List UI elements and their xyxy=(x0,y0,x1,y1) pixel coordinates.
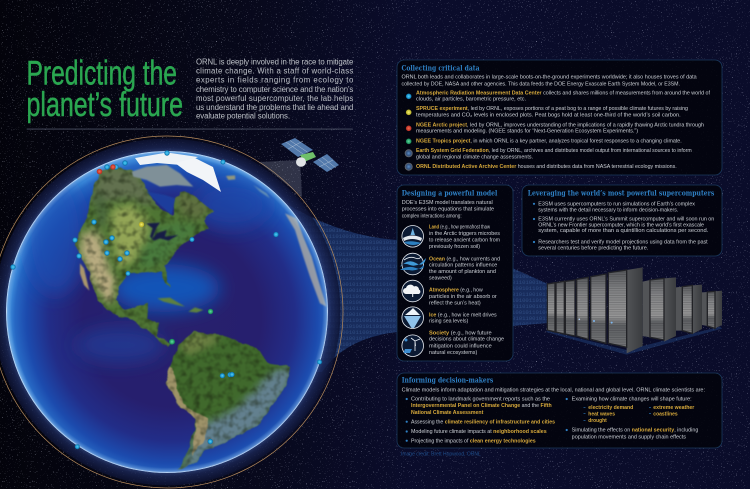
model factors text: the amount of plankton and xyxy=(429,269,496,275)
intro paragraph: us understand the problems that lie ahead and xyxy=(196,103,353,112)
intro paragraph: climate change. With a staff of world-class xyxy=(196,67,353,76)
binary data stream from model panel to supercomputers: 01011001011 xyxy=(512,267,550,274)
left column text: Assessing the climate resiliency of infrastructure and cities xyxy=(411,419,555,425)
legend text: SPRUCE experiment, led by ORNL, exposes portions of a peat bog to a range of possible climate futures by raising xyxy=(416,106,688,112)
model factors text: rising sea levels) xyxy=(429,319,468,325)
satellite body xyxy=(300,152,316,162)
eastern forest xyxy=(143,227,189,261)
sensor beam xyxy=(259,160,302,197)
globe xyxy=(0,136,343,488)
model factors text xyxy=(429,225,504,356)
Africa and Europe on the limb xyxy=(253,185,327,307)
left column text xyxy=(411,397,555,444)
binary data stream from globe to model panel: 1001011010010110010110100101101001 xyxy=(285,317,400,324)
title: planet’s future xyxy=(26,86,183,124)
intro paragraph: evaluate potential solutions. xyxy=(196,112,290,121)
Mexico interior xyxy=(98,280,114,302)
legend icons xyxy=(405,94,413,171)
Arctic ice and Greenland xyxy=(135,152,221,192)
intro paragraph: most powerful supercomputer, the lab helps xyxy=(196,94,353,103)
image credit: Image credit: Brett Hopwood, ORNL xyxy=(401,452,481,458)
binary data stream from model panel to supercomputers: 10010110100 xyxy=(512,309,550,316)
heading: Collecting critical data xyxy=(402,63,480,72)
legend text xyxy=(416,90,711,170)
left column text: Contributing to landmark government reports such as the xyxy=(411,397,550,403)
southern cone xyxy=(178,367,293,473)
legend text: global and regional climate change assessments. xyxy=(416,155,533,161)
ocean xyxy=(6,151,328,473)
binary data stream from model panel to supercomputers: 01101001011 xyxy=(512,279,550,286)
panel intro xyxy=(402,74,697,87)
atmosphere ring xyxy=(0,138,340,486)
left column text: Modeling future climate impacts at neighborhood scales xyxy=(411,429,547,435)
model factors text: particles in the air absorb or xyxy=(429,294,497,300)
bullet text: Researchers test and verify model projections using data from the past xyxy=(538,240,708,246)
solar panel right xyxy=(313,154,339,172)
right column text: Simulating the effects on national security, including xyxy=(572,428,698,434)
Great Plains xyxy=(112,205,148,270)
supercomputer racks xyxy=(546,267,722,355)
heading: Informing decision-makers xyxy=(402,376,493,385)
model factors text: decisions about climate change xyxy=(429,337,504,343)
intro paragraph: chemistry to computer science and the nation’s xyxy=(196,85,353,94)
model factors text: Land (e.g., how permafrost thaw xyxy=(429,225,491,231)
model factors text: Society (e.g., how future xyxy=(429,330,492,336)
panel intro: collected by DOE, NASA and other agencies. This data feeds the DOE Energy Exascale Earth System Model, or E3SM. xyxy=(402,81,680,87)
bullet text: systems with the detail necessary to inform decision-makers. xyxy=(538,207,678,213)
icon: ice xyxy=(402,307,424,329)
title: Predicting the xyxy=(26,54,177,92)
panel intro: DOE’s E3SM model translates natural xyxy=(402,200,493,206)
binary data stream from globe to model panel: 1001011010010110010110100101101001 xyxy=(285,269,400,276)
binary data stream from globe to model panel: 1010011010010110100101100101101001 xyxy=(285,257,400,264)
bullet text: system, capable of more than a quintillion calculations per second. xyxy=(538,228,708,234)
Hudson Bay xyxy=(147,192,175,215)
binary data stream from model panel to supercomputers: 10100110100 xyxy=(512,297,550,304)
right column text: population movements and supply chain effects xyxy=(572,434,686,440)
intro paragraph xyxy=(196,58,354,121)
floor glow xyxy=(546,327,722,355)
Canada boreal xyxy=(90,166,157,205)
Great Lakes xyxy=(146,223,178,241)
intro paragraph: ORNL is deeply involved in the race to mitigate xyxy=(196,58,353,67)
Hispaniola xyxy=(188,307,203,313)
binary data stream from model panel to supercomputers: 01011001011 xyxy=(512,315,550,322)
solar panel left xyxy=(281,138,313,157)
bullet text xyxy=(538,202,714,251)
binary data stream from model panel to supercomputers: 10100110100 xyxy=(512,273,550,280)
panel: designing a powerful model xyxy=(397,185,513,361)
right column text: heat waves xyxy=(588,411,615,417)
icon: ocean xyxy=(400,253,426,275)
binary data stream from model panel to supercomputers xyxy=(513,268,547,326)
binary data stream from globe to model panel: 1001011010010110010110100101101001 xyxy=(285,245,400,252)
limb haze xyxy=(6,151,328,473)
binary data stream from globe to model panel: 1001011010010110010110100101101001 xyxy=(285,221,400,228)
Rockies xyxy=(94,194,106,224)
binary data stream from model panel to supercomputers: 01011001011 xyxy=(512,291,550,298)
bullets xyxy=(533,203,535,243)
North America xyxy=(74,164,236,348)
bullet text: E3SM uses supercomputers to run simulations of Earth’s complex xyxy=(538,202,695,208)
Baja California xyxy=(80,263,89,291)
heading: Designing a powerful model xyxy=(402,189,498,198)
binary data stream from globe to model panel: 0110100101100101101001011010010110 xyxy=(285,239,400,246)
binary data stream from model panel to supercomputers: 01101001011 xyxy=(512,303,550,310)
legend text: Atmospheric Radiation Measurement Data Center collects and shares millions of measurements from around the world of xyxy=(416,90,711,96)
binary data stream from globe to model panel: 0101100101101001011010010110100101 xyxy=(285,227,400,234)
left column text: Intergovernmental Panel on Climate Change and the Fifth xyxy=(411,403,552,409)
model factors text: to release ancient carbon from xyxy=(429,237,500,243)
title xyxy=(26,54,183,124)
bullets xyxy=(406,398,651,442)
left column text: Projecting the impacts of clean energy technologies xyxy=(411,438,536,444)
South America xyxy=(165,330,290,470)
icon: land xyxy=(402,226,424,247)
binary data stream from globe to model panel: 1010011010010110100101100101101001 xyxy=(285,329,400,336)
satellite xyxy=(259,138,339,197)
heading: Leveraging the world’s most powerful supercomputers xyxy=(528,189,714,198)
model factors text: Atmosphere (e.g., how xyxy=(429,288,483,294)
binary data stream from model panel to supercomputers: 10010110100 xyxy=(512,285,550,292)
Arctic islands xyxy=(132,165,193,187)
western deserts xyxy=(79,230,115,293)
globe data site markers xyxy=(10,150,322,449)
intro paragraph: experts in fields ranging from ecology to xyxy=(196,76,354,85)
bullet text: E3SM currently uses ORNL’s Summit supercomputer and will soon run on xyxy=(538,216,714,222)
binary data stream from globe to model panel: 0101100101101001011010010110100101 xyxy=(285,323,400,330)
panel: collecting critical data xyxy=(397,60,722,175)
legend text: measurements and modeling. (NGEE stands for “Next-Generation Ecosystem Experiments.”) xyxy=(416,129,638,135)
Venezuela coast xyxy=(178,332,220,355)
panel intro: Climate models inform adaptation and mitigation strategies at the local, national and global level. ORNL climate scientists are: xyxy=(402,388,705,394)
satellite dish xyxy=(296,157,306,167)
binary data stream from globe to model panel: 0101100101101001011010010110100101 xyxy=(285,299,400,306)
binary data stream from globe to model panel: 1001011010010110010110100101101001 xyxy=(285,293,400,300)
bullet text: ORNL’s new Frontier supercomputer, which is the world’s first exascale xyxy=(538,222,704,228)
binary data stream from model panel to supercomputers: 10100110100 xyxy=(512,321,550,328)
model factors text: circulation patterns influence xyxy=(429,263,497,269)
legend text: ORNL Distributed Active Archive Center houses and distributes data from NASA terrestrial ecology missions. xyxy=(416,164,677,170)
model factors text: previously frozen soil) xyxy=(429,244,480,250)
atmosphere outline xyxy=(0,136,343,488)
Iceland xyxy=(226,175,235,180)
rack front panels xyxy=(547,270,715,347)
legend text: temperatures and CO₂ levels in enclosed plots. Peat bogs hold at least one-third of the world’s soil carbon. xyxy=(416,113,681,119)
panel intro xyxy=(402,200,494,219)
left column text: National Climate Assessment xyxy=(411,410,484,416)
icon: society xyxy=(402,335,424,357)
model factors text: Ice (e.g., how ice melt drives xyxy=(429,312,497,318)
legend text: Earth System Grid Federation, led by ORNL, archives and distributes model output from international sources to inform xyxy=(416,148,692,154)
binary data stream from globe to model panel: 0101100101101001011010010110100101 xyxy=(285,203,400,210)
Andes xyxy=(166,367,208,455)
model factors text: mitigation could influence xyxy=(429,343,492,349)
model factors text: reflect the sun’s heat) xyxy=(429,300,481,306)
panel: informing decision-makers xyxy=(397,373,722,448)
binary data stream from globe to model panel: 0110100101100101101001011010010110 xyxy=(285,359,400,366)
right column text: Examining how climate changes will shape future: xyxy=(572,397,692,403)
binary data stream from globe to model panel: 0110100101100101101001011010010110 xyxy=(285,263,400,270)
binary data stream from globe to model panel: 1010011010010110100101100101101001 xyxy=(285,353,400,360)
binary data stream from globe to model panel xyxy=(285,203,400,372)
model factors text: seaweed) xyxy=(429,275,452,281)
binary data stream from globe to model panel: 1010011010010110100101100101101001 xyxy=(285,281,400,288)
binary data stream from globe to model panel: 0110100101100101101001011010010110 xyxy=(285,311,400,318)
binary data stream from globe to model panel: 0101100101101001011010010110100101 xyxy=(285,251,400,258)
legend text: NGEE Tropics project, in which ORNL is a key partner, analyzes tropical forest responses to a changing climate. xyxy=(416,138,682,144)
panel: leveraging supercomputers xyxy=(522,185,722,256)
right column text: electricity demand xyxy=(588,405,633,411)
icon: atmosphere xyxy=(402,280,424,302)
panel intro: ORNL both leads and collaborates in large-scale boots-on-the-ground experiments worldwide; it also houses troves of data xyxy=(402,74,697,80)
model factors text: in the Arctic triggers microbes xyxy=(429,231,500,237)
Labrador xyxy=(176,192,207,218)
binary data stream from globe to model panel: 0110100101100101101001011010010110 xyxy=(285,335,400,342)
legend text: clouds, air particles, barometric pressure, etc. xyxy=(416,97,526,103)
right column text: extreme weather xyxy=(653,405,694,411)
model factors text: Ocean (e.g., how currents and xyxy=(429,256,500,262)
rack side panels xyxy=(627,267,722,353)
binary data stream from globe to model panel: 0110100101100101101001011010010110 xyxy=(285,287,400,294)
bullet text: several centuries before predicting the future. xyxy=(538,245,648,251)
ocean glow xyxy=(25,175,270,363)
panel intro: processes into equations that simulate xyxy=(402,207,494,213)
legend text: NGEE Arctic project , led by ORNL, improves understanding of the implications of a rapidly thawing Arctic tundra through xyxy=(416,122,704,128)
binary data stream from globe to model panel: 0101100101101001011010010110100101 xyxy=(285,347,400,354)
model factors text: natural ecosystems) xyxy=(429,350,477,356)
binary data stream from globe to model panel: 0101100101101001011010010110100101 xyxy=(285,275,400,282)
binary data stream from globe to model panel: 1010011010010110100101100101101001 xyxy=(285,305,400,312)
binary data stream from globe to model panel: 1010011010010110100101100101101001 xyxy=(285,233,400,240)
right column text xyxy=(572,397,698,440)
panel intro: complex interactions among: xyxy=(402,213,462,219)
binary data stream from globe to model panel: 1001011010010110010110100101101001 xyxy=(285,341,400,348)
right column text: coastlines xyxy=(653,411,678,417)
Cuba xyxy=(157,298,185,307)
binary data stream from globe to model panel: 0110100101100101101001011010010110 xyxy=(285,215,400,222)
binary data stream from globe to model panel: 1010011010010110100101100101101001 xyxy=(285,209,400,216)
right column text: drought xyxy=(588,418,607,424)
